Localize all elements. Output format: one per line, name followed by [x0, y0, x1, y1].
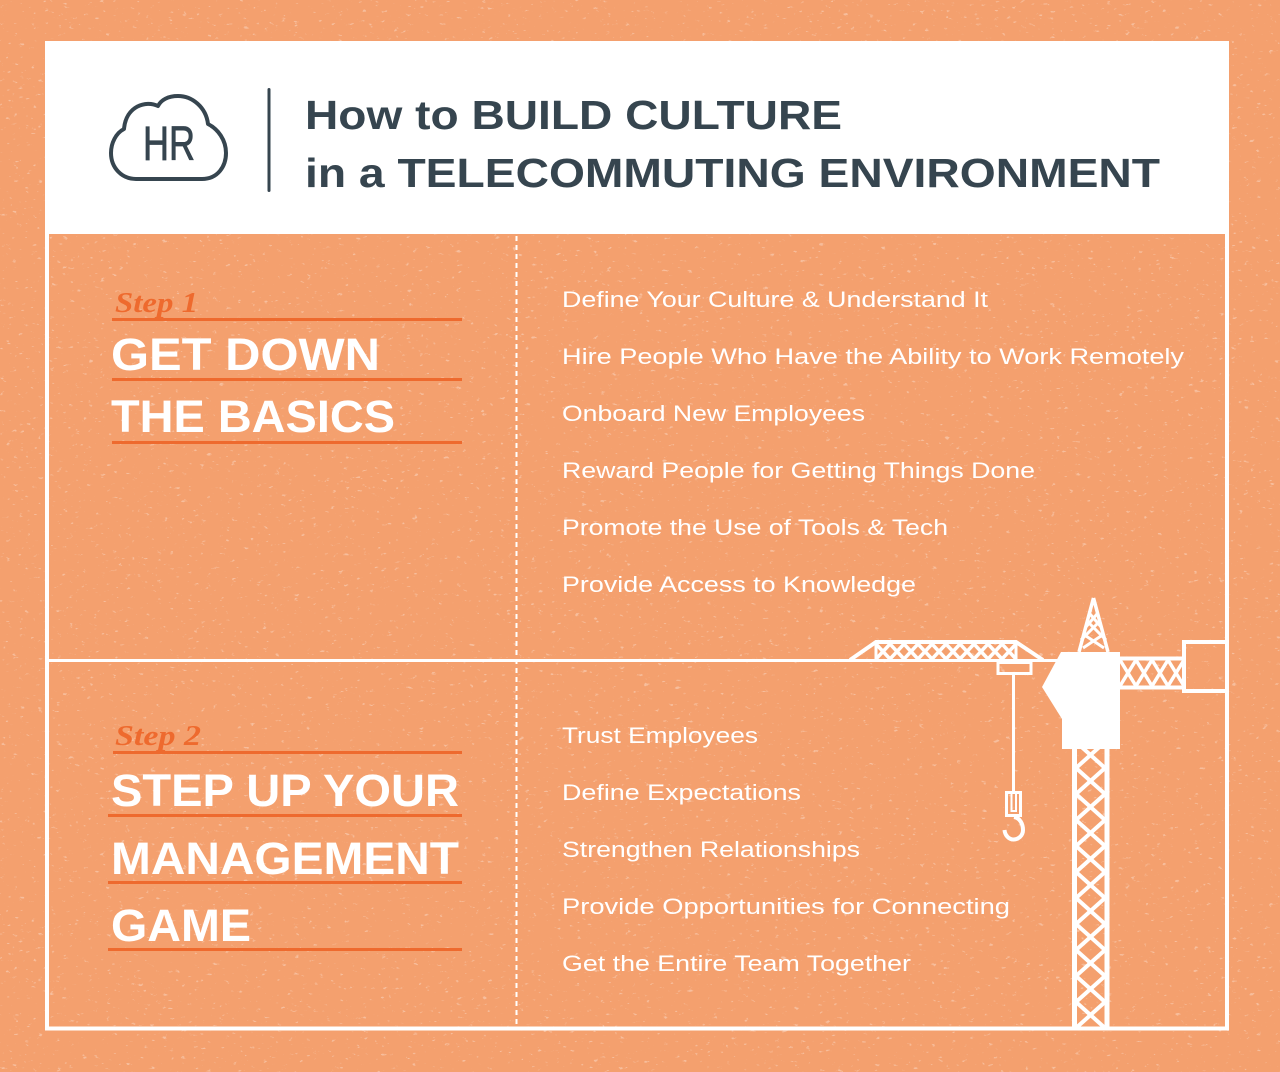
panel: step 1 list: Onboard New Employees [562, 401, 865, 426]
crane jib truss [850, 642, 1043, 660]
step 1 label: Step 1 [115, 287, 198, 319]
panel: step 1 heading [111, 287, 462, 444]
heading: step up your management game: STEP UP YOUR [111, 765, 459, 816]
panel: step 1 list: Promote the Use of Tools & Tech [562, 515, 948, 540]
title: How to BUILD CULTURE [305, 92, 842, 138]
heading: get down the basics [111, 329, 395, 442]
frame outline [47, 234, 1227, 1028]
panel: step 2 list [562, 723, 1010, 976]
icon: HR cloud logo [111, 96, 226, 179]
panel: step 2 list: Define Expectations [562, 780, 801, 805]
icon: construction crane [850, 598, 1227, 1028]
panel: step 2 list: Provide Opportunities for Connecting [562, 894, 1010, 919]
step 2 label: Step 2 [115, 720, 201, 752]
panel: step 1 list [562, 287, 1184, 597]
heading: get down the basics: THE BASICS [111, 391, 395, 442]
crane counterweight [1184, 642, 1227, 691]
heading: get down the basics: GET DOWN [111, 329, 380, 380]
panel: step 2 list: Strengthen Relationships [562, 837, 860, 862]
panel: step 2 list: Trust Employees [562, 723, 758, 748]
crane counter jib [1120, 658, 1184, 688]
crane trolley and hook [998, 662, 1031, 840]
panel: step 1 list: Provide Access to Knowledge [562, 572, 916, 597]
header panel [45, 41, 1229, 234]
title [305, 92, 1160, 196]
crane tower [1074, 742, 1107, 1028]
heading: step up your management game [111, 765, 459, 951]
heading: step up your management game: GAME [111, 900, 251, 951]
panel: step 2 list: Get the Entire Team Together [562, 951, 911, 976]
heading: step up your management game: MANAGEMENT [111, 833, 459, 884]
panel: step 1 list: Define Your Culture & Understand It [562, 287, 988, 312]
panel: step 1 list: Reward People for Getting Things Done [562, 458, 1035, 483]
panel: step 2 heading [108, 720, 462, 951]
title: in a TELECOMMUTING ENVIRONMENT [305, 150, 1160, 196]
crane mast top [1079, 598, 1108, 652]
icon: HR cloud logo: HR [143, 118, 195, 171]
panel: step 1 list: Hire People Who Have the Ability to Work Remotely [562, 344, 1184, 369]
crane cab [1042, 652, 1120, 749]
